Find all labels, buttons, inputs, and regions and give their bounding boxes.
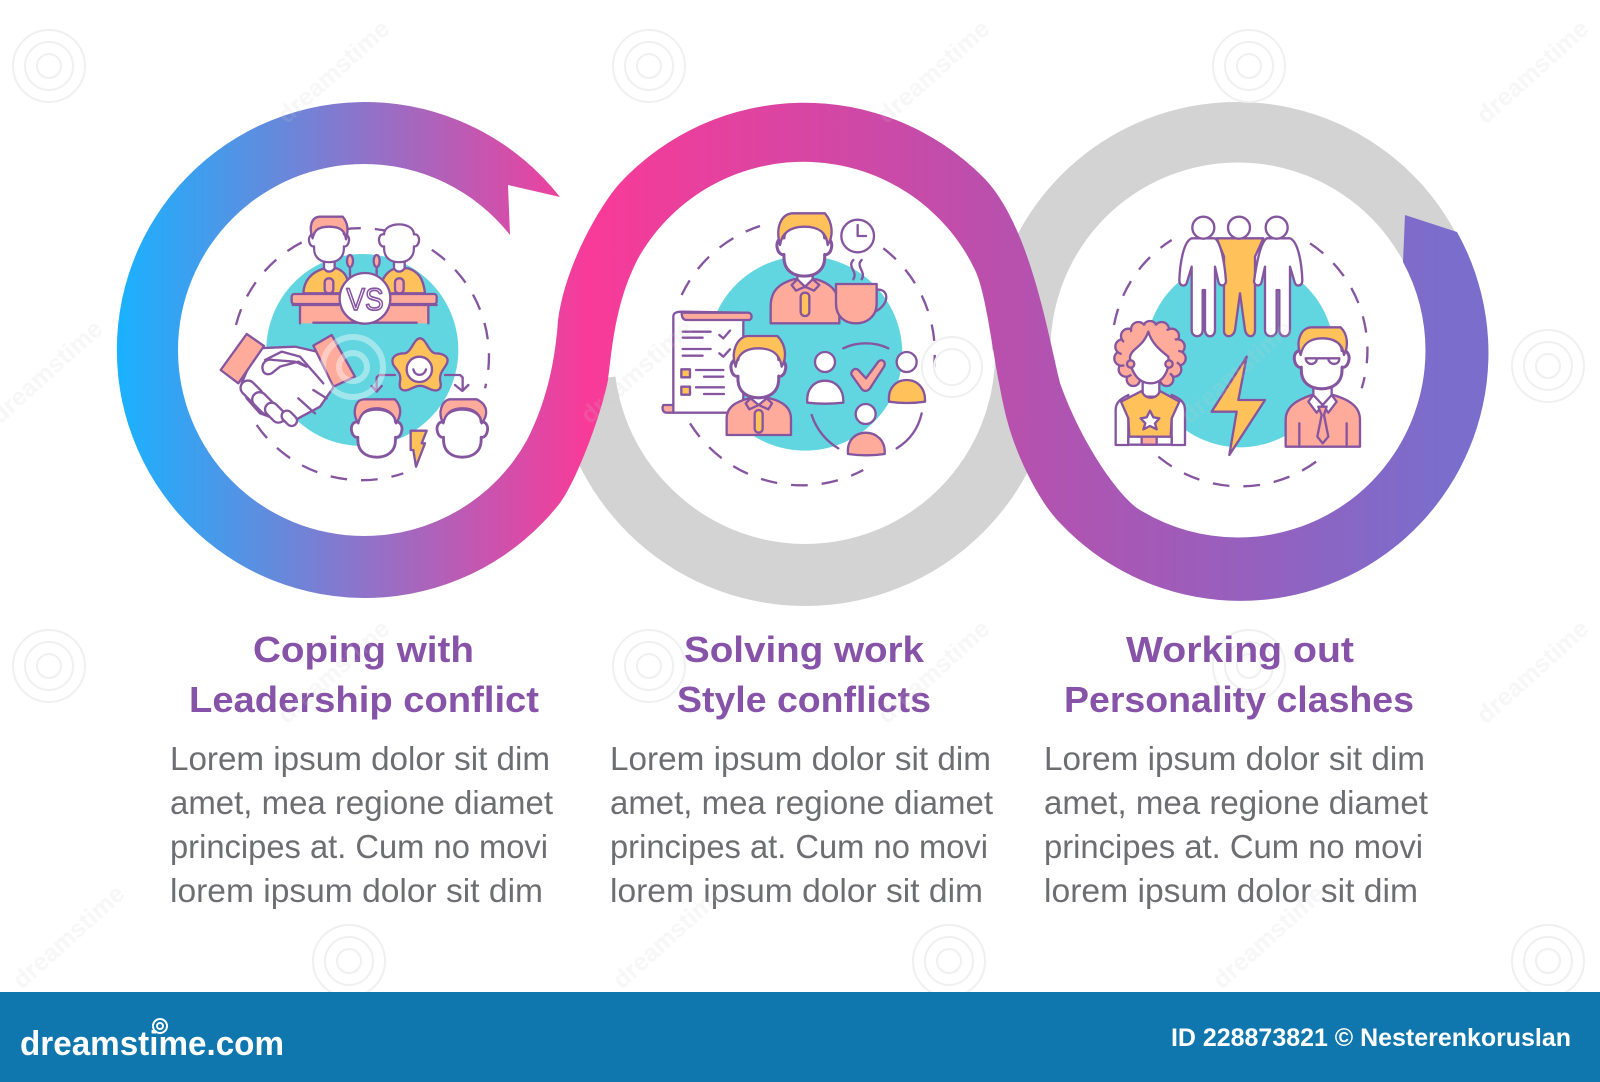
title: coping with leadership conflict xyxy=(189,629,539,720)
icon: personality clashes xyxy=(1114,217,1367,486)
woman with curly hair xyxy=(1114,321,1186,445)
title: solving work style conflicts: Solving work xyxy=(684,629,925,670)
watermark text: dreamstime xyxy=(272,15,395,129)
gradient ribbon flowing through the three circles xyxy=(117,102,1488,601)
clock xyxy=(841,220,874,252)
watermark text: dreamstime xyxy=(1175,315,1298,429)
watermark text: dreamstime xyxy=(575,315,698,429)
collaboration cycle xyxy=(807,343,925,455)
microphones xyxy=(347,255,380,280)
title: working out personality clashes: Personality clashes xyxy=(1064,679,1414,720)
left figure xyxy=(1179,217,1226,336)
text block: column 3 xyxy=(1044,740,1428,909)
title: coping with leadership conflict: Leadership conflict xyxy=(189,679,539,720)
text block: column 3: lorem ipsum dolor sit dim xyxy=(1044,872,1418,909)
text block: column 1: principes at. Cum no movi xyxy=(170,828,548,865)
VS badge: VS xyxy=(346,282,384,317)
star badge xyxy=(392,338,448,390)
right figure xyxy=(1254,217,1302,336)
teal backdrop circle xyxy=(266,254,458,446)
text block: column 2 xyxy=(610,740,993,909)
title: coping with leadership conflict: Coping with xyxy=(253,629,474,670)
watermark text: dreamstime xyxy=(272,615,395,729)
watermark text: dreamstime xyxy=(1471,615,1594,729)
teal backdrop circle xyxy=(1146,259,1334,447)
conflicting heads xyxy=(351,399,488,457)
icon: work style conflicts xyxy=(663,213,935,485)
text block: column 2: Lorem ipsum dolor sit dim xyxy=(610,740,991,777)
debate desks xyxy=(292,294,437,323)
watermark text: dreamstime xyxy=(607,880,730,994)
front colleague xyxy=(727,336,791,435)
title: solving work style conflicts: Style conflicts xyxy=(677,679,931,720)
lightning bolt xyxy=(411,431,427,467)
text block: column 1 xyxy=(170,740,553,909)
watermark text: dreamstime xyxy=(872,615,995,729)
flow arrows xyxy=(372,375,468,392)
text block: column 3: amet, mea regione diamet xyxy=(1044,784,1428,821)
VS badge xyxy=(340,273,390,324)
dashed orbit xyxy=(682,226,760,295)
watermark text: dreamstime xyxy=(1207,880,1330,994)
text block: column 1: lorem ipsum dolor sit dim xyxy=(170,872,543,909)
text block: column 2: amet, mea regione diamet xyxy=(610,784,993,821)
white inner discs of steps 2 and 3 xyxy=(614,162,1426,542)
text block: column 1: amet, mea regione diamet xyxy=(170,784,553,821)
left speaker xyxy=(303,217,350,293)
checklist document xyxy=(663,312,752,413)
text block: column 3: principes at. Cum no movi xyxy=(1044,828,1423,865)
lightning bolt xyxy=(1212,357,1265,455)
image id and author: ID 228873821 © Nesterenkoruslan xyxy=(1171,1024,1571,1052)
watermark text: dreamstime xyxy=(7,880,130,994)
text block: column 1: Lorem ipsum dolor sit dim xyxy=(170,740,550,777)
text block: column 2: principes at. Cum no movi xyxy=(610,828,988,865)
gray ring behind step 3 xyxy=(1020,133,1447,350)
top colleague xyxy=(771,213,839,323)
dreamstime logo: dreamstime.com xyxy=(20,1025,284,1063)
icon: leadership conflict xyxy=(221,217,489,480)
dashed orbit xyxy=(236,228,489,388)
gray ring behind step 2 xyxy=(586,354,1026,575)
teal backdrop circle xyxy=(708,256,902,451)
title: working out personality clashes xyxy=(1064,629,1414,720)
right speaker xyxy=(379,224,425,293)
man with glasses xyxy=(1286,327,1360,447)
text block: column 3: Lorem ipsum dolor sit dim xyxy=(1044,740,1425,777)
title: solving work style conflicts xyxy=(677,629,931,720)
watermark text: dreamstime xyxy=(1471,15,1594,129)
handshake xyxy=(221,334,355,428)
steam xyxy=(851,260,863,279)
watermark text: dreamstime xyxy=(872,15,995,129)
dashed orbit xyxy=(1114,240,1172,325)
title: working out personality clashes: Working out xyxy=(1126,629,1354,670)
text block: column 2: lorem ipsum dolor sit dim xyxy=(610,872,983,909)
centre figure xyxy=(1217,217,1263,336)
coffee cup xyxy=(836,284,886,323)
footer band xyxy=(0,992,1600,1082)
